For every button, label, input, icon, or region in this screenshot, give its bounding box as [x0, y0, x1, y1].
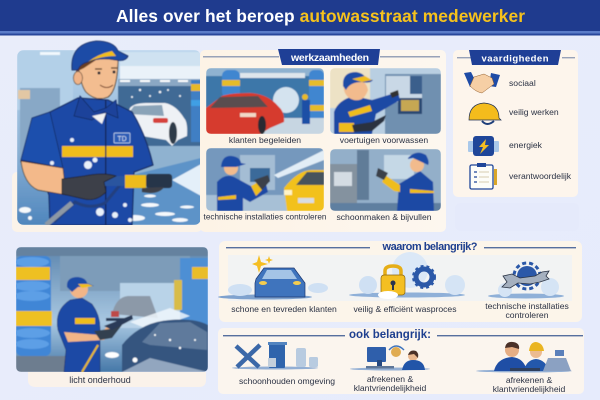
panel: vaardigheden	[453, 50, 578, 197]
heading: vaardigheden: vaardigheden	[482, 54, 549, 64]
heading: ook belangrijk:	[349, 329, 431, 341]
icon: wrench and gear	[488, 263, 564, 298]
caption: technische installaties	[485, 301, 569, 311]
icon: white car in hall	[124, 103, 187, 146]
label: sociaal: sociaal	[509, 78, 536, 88]
caption: technische installaties controleren	[204, 212, 327, 222]
gloves	[62, 174, 116, 200]
heading: werkzaamheden: werkzaamheden	[290, 52, 369, 64]
tile: klanten begeleiden	[206, 68, 324, 145]
head	[78, 56, 118, 99]
panel: werkzaamheden	[200, 49, 446, 232]
label: veilig werken: veilig werken	[509, 107, 559, 117]
caption: schone en tevreden klanten	[231, 304, 337, 314]
icon: clipboard	[470, 163, 497, 189]
caption: afrekenen &	[506, 375, 552, 385]
icon: handshake	[464, 72, 500, 93]
tile: schoonmaken & bijvullen	[330, 149, 441, 222]
spray	[172, 164, 200, 196]
hero worker with pressure washer: TD	[117, 136, 127, 143]
label: verantwoordelijk: verantwoordelijk	[509, 171, 572, 181]
panel: hero backing	[12, 172, 202, 232]
sleeve	[21, 112, 63, 168]
heading: vaardigheden	[469, 50, 561, 65]
illustration: licht onderhoud	[14, 247, 208, 387]
body	[21, 98, 153, 225]
heading: werkzaamheden	[278, 49, 380, 65]
hero worker with pressure washer	[21, 41, 172, 225]
icon: tools and bin	[232, 342, 318, 370]
caption: schoonmaken & bijvullen	[336, 212, 432, 222]
badge	[114, 133, 130, 143]
forearm	[21, 161, 66, 195]
caption: veilig & efficiënt wasproces	[353, 304, 457, 314]
caption: afrekenen &	[367, 374, 413, 384]
icon: staff and cash register	[476, 342, 572, 372]
worker	[57, 298, 100, 372]
cap	[72, 41, 128, 70]
icon: safety helmet	[469, 103, 501, 124]
pressure washer	[46, 174, 172, 225]
caption bar	[28, 372, 206, 387]
panel: waarom belangrijk	[218, 241, 582, 322]
caption: voertuigen voorwassen	[340, 135, 428, 145]
heading: waarom belangrijk?	[382, 241, 478, 253]
panel: ook belangrijk: klantvriendelijkheid	[354, 383, 427, 393]
title: Alles over het beroep autowasstraat medewerker	[116, 6, 525, 26]
label: energiek: energiek	[509, 140, 543, 150]
panel: waarom belangrijk: controleren	[506, 310, 549, 320]
panel: ook belangrijk	[218, 328, 584, 394]
hero scene: car wash hall	[17, 50, 205, 225]
collar	[74, 96, 118, 120]
icon: counter and person	[350, 346, 430, 370]
icon: padlock and gear	[349, 252, 465, 299]
tile: technische installaties controleren	[204, 148, 327, 222]
faint panel under vaardigheden	[455, 203, 579, 231]
icon: energy	[468, 136, 499, 156]
title banner	[0, 0, 600, 36]
caption: klanten begeleiden	[229, 135, 301, 145]
icon: clean car	[218, 255, 328, 300]
caption: schoonhouden omgeving	[239, 376, 335, 386]
yellow chest stripe	[62, 146, 133, 157]
caption: licht onderhoud	[69, 375, 131, 385]
panel: ook belangrijk: klantvriendelijkheid	[493, 384, 566, 394]
tile: voertuigen voorwassen	[330, 68, 441, 145]
